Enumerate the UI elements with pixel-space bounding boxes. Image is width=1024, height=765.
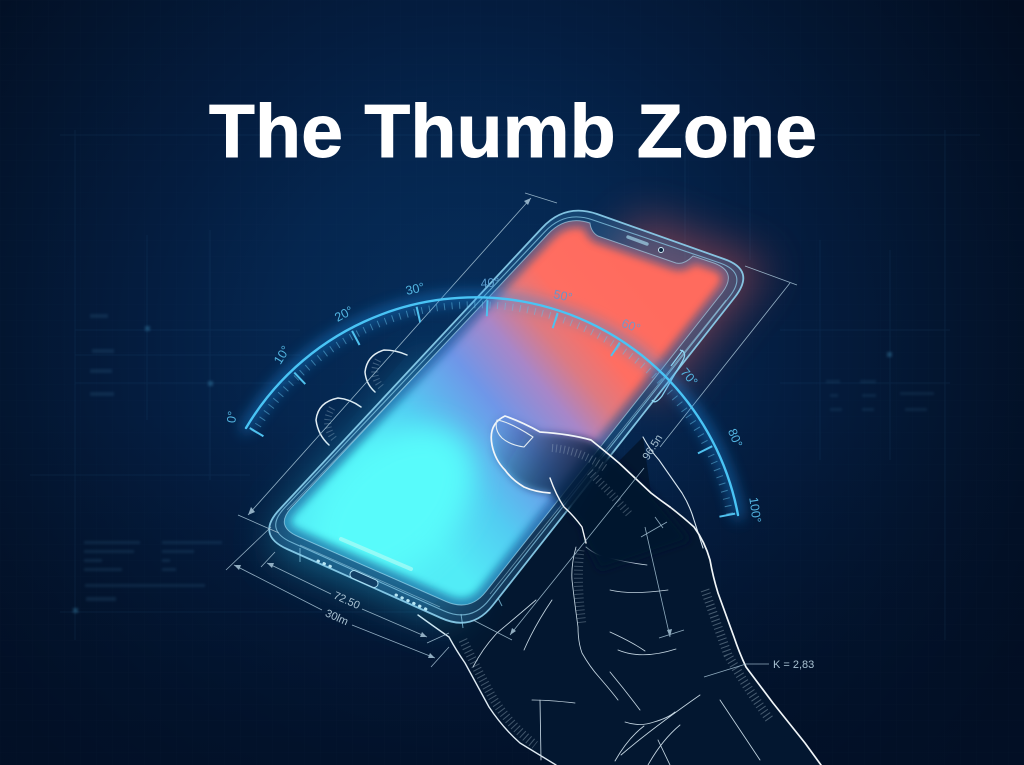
label 72.50: 72.50 xyxy=(332,590,362,612)
screen outline xyxy=(284,221,728,605)
dimension labels xyxy=(323,433,814,671)
gauge labels: 70° xyxy=(678,365,700,389)
finger two xyxy=(316,398,361,445)
gauge labels: 100° xyxy=(746,496,764,524)
gauge glow xyxy=(246,297,738,515)
width dimension lower xyxy=(226,527,449,667)
faint spec table right xyxy=(826,380,934,411)
gauge arc xyxy=(246,297,738,515)
palm crease lines xyxy=(473,520,760,765)
finger hatching xyxy=(328,360,382,440)
thumb hatching xyxy=(552,448,630,515)
camera xyxy=(658,248,664,252)
gauge labels: 40° xyxy=(480,275,500,291)
charging port xyxy=(349,569,379,589)
thumb fill xyxy=(491,416,690,570)
phone xyxy=(250,200,750,630)
earpiece xyxy=(628,237,647,244)
gauge labels: 20° xyxy=(332,303,356,325)
screen heat map xyxy=(284,220,728,605)
gauge major ticks xyxy=(250,300,735,517)
gauge labels: 60° xyxy=(620,316,642,336)
finger one xyxy=(365,350,407,392)
hand silhouette xyxy=(418,437,821,765)
dimension lines xyxy=(226,193,797,677)
thumb xyxy=(491,416,690,570)
label 96.5n: 96.5n xyxy=(640,433,665,462)
speaker holes right xyxy=(396,595,430,611)
hatch shading outer xyxy=(705,590,770,720)
hatch shading palm xyxy=(578,550,582,625)
wrist outline xyxy=(418,615,556,765)
thumb nail xyxy=(496,420,533,447)
home indicator xyxy=(341,539,411,569)
hand outer edge xyxy=(670,507,821,765)
gauge minor ticks xyxy=(254,305,730,515)
heat glow behind phone xyxy=(270,215,770,620)
hatch shading wrist xyxy=(463,640,535,745)
angle gauge xyxy=(224,275,764,524)
side buttons xyxy=(652,350,685,402)
frame inner line xyxy=(276,217,737,615)
width dimension upper xyxy=(261,552,449,643)
title: The Thumb Zone xyxy=(209,89,817,173)
hand back outline xyxy=(643,437,703,548)
phone height dimension right xyxy=(473,266,797,640)
thumb base line xyxy=(550,478,586,543)
gauge labels: 30° xyxy=(404,280,426,298)
label K: K = 2,83 xyxy=(773,659,814,671)
side rail lines xyxy=(287,236,726,607)
frame corner seams xyxy=(300,548,502,628)
gauge labels xyxy=(224,275,764,524)
phone height dimension left xyxy=(238,193,557,533)
gauge labels: 0° xyxy=(224,410,240,424)
speaker holes left xyxy=(318,561,334,568)
faint spec table left xyxy=(84,314,222,601)
faint blueprint nodes xyxy=(73,326,892,613)
faint blueprint grid xyxy=(30,130,980,640)
K callout leader xyxy=(704,664,769,677)
hand behind phone xyxy=(316,350,821,765)
gauge labels: 80° xyxy=(725,427,745,449)
gauge labels: 10° xyxy=(271,343,293,367)
thumb outline xyxy=(491,416,670,507)
label 30lm: 30lm xyxy=(323,608,350,628)
phone body xyxy=(269,211,743,623)
gauge labels: 50° xyxy=(552,287,574,305)
hand dimension xyxy=(641,517,684,638)
dimension arrowheads xyxy=(234,198,672,658)
